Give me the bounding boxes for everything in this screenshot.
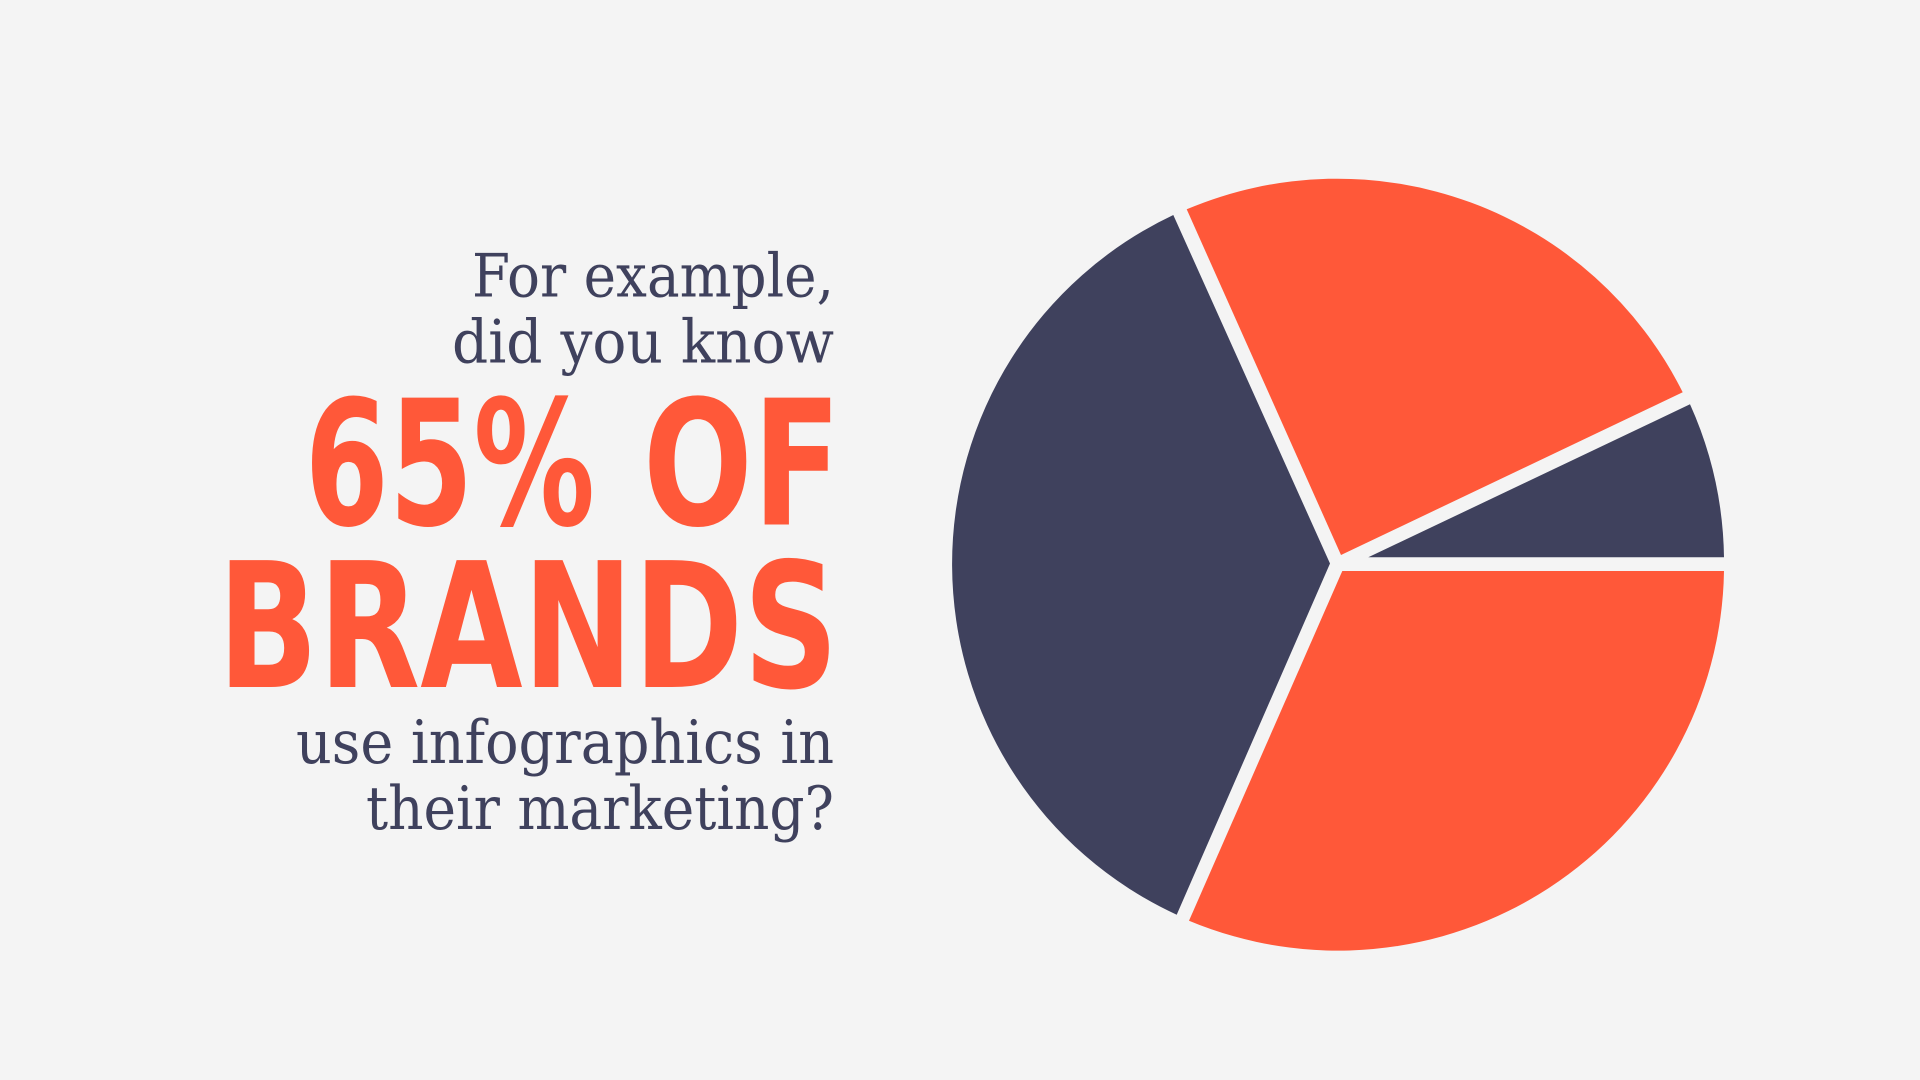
text: closing line 2: their marketing? — [366, 774, 834, 844]
heading: 65% of — [304, 364, 841, 566]
heading: brands: BRANDS — [218, 526, 838, 729]
pie slice: orange bottom — [1189, 571, 1724, 951]
pie slice: large navy left — [952, 215, 1330, 915]
text: closing line 1: use infographics in — [296, 708, 834, 778]
text: intro line 1: For example, — [472, 242, 834, 312]
pie slice: orange top — [1187, 179, 1683, 555]
text: intro line 2: did you know — [452, 308, 834, 378]
text: OF: OF — [643, 364, 841, 566]
pie chart — [952, 179, 1724, 951]
text block: statistic statement — [218, 242, 841, 844]
text: 65%: 65% — [304, 364, 595, 566]
pie slice: small navy right — [1368, 404, 1724, 557]
